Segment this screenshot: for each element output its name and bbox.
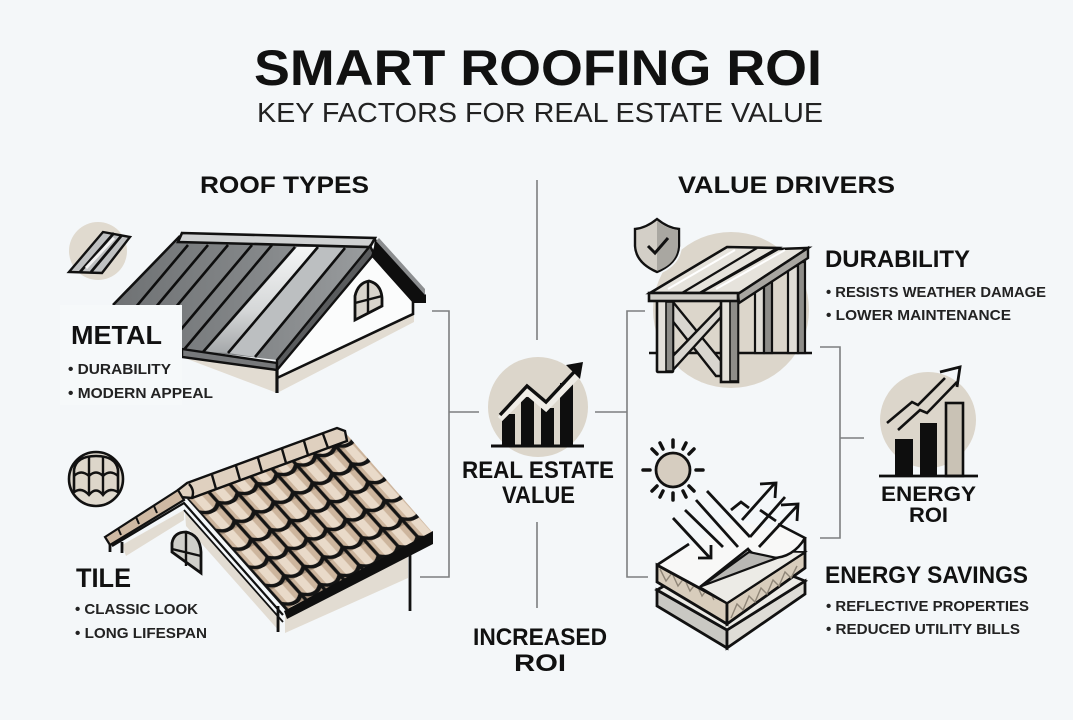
label: energy savings: • REFLECTIVE PROPERTIES: [826, 598, 1029, 615]
label: real estate value: VALUE: [502, 482, 575, 509]
icon: durability framing: [649, 232, 812, 388]
icon: sun: [643, 440, 703, 500]
subtitle: KEY FACTORS FOR REAL ESTATE VALUE: [257, 97, 823, 128]
icon: metal window: [355, 281, 382, 320]
label: increased roi: INCREASED: [473, 624, 607, 651]
label panel: metal: METAL: [71, 320, 162, 350]
ridge cap: [178, 428, 347, 498]
bracing: [667, 302, 722, 376]
label: tile: • LONG LIFESPAN: [75, 625, 207, 642]
label: tile: TILE: [76, 563, 131, 593]
label panel: metal: • MODERN APPEAL: [68, 385, 213, 402]
icon: shield: [635, 219, 679, 272]
label: increased roi: ROI: [514, 650, 566, 677]
metal roof illustration: [98, 233, 426, 393]
tile roof illustration: [105, 428, 433, 633]
label: energy savings: [825, 562, 1029, 638]
label: energy roi: [881, 483, 976, 527]
label: durability: • RESISTS WEATHER DAMAGE: [826, 284, 1046, 301]
icon: tile window: [172, 532, 201, 573]
label: energy roi: ROI: [909, 504, 948, 527]
label: durability: [825, 246, 1046, 324]
heading: value drivers: VALUE DRIVERS: [678, 172, 895, 199]
icon: metal panel: [69, 222, 130, 280]
connector lines: [420, 180, 864, 608]
label: energy savings: ENERGY SAVINGS: [825, 562, 1028, 589]
back studs: [755, 262, 805, 353]
icon: insulation layers: [657, 520, 805, 648]
label: energy savings: • REDUCED UTILITY BILLS: [826, 621, 1020, 638]
label panel: metal: [60, 305, 213, 405]
icon: solar reflection arrows: [673, 483, 798, 558]
heading: roof types: ROOF TYPES: [200, 172, 369, 199]
label: increased roi: [473, 624, 607, 677]
label: durability: • LOWER MAINTENANCE: [826, 307, 1011, 324]
label: real estate value: [462, 457, 614, 509]
label: durability: DURABILITY: [825, 246, 970, 273]
title: SMART ROOFING ROI: [254, 40, 822, 96]
label: tile: [75, 563, 207, 642]
label: energy roi: ENERGY: [881, 483, 976, 506]
label: real estate value: REAL ESTATE: [462, 457, 614, 484]
icon: real estate value chart: [488, 357, 588, 457]
icon: energy roi chart: [879, 367, 978, 476]
icon: tile: [69, 452, 123, 506]
label: tile: • CLASSIC LOOK: [75, 601, 198, 618]
label panel: metal: • DURABILITY: [68, 361, 171, 378]
